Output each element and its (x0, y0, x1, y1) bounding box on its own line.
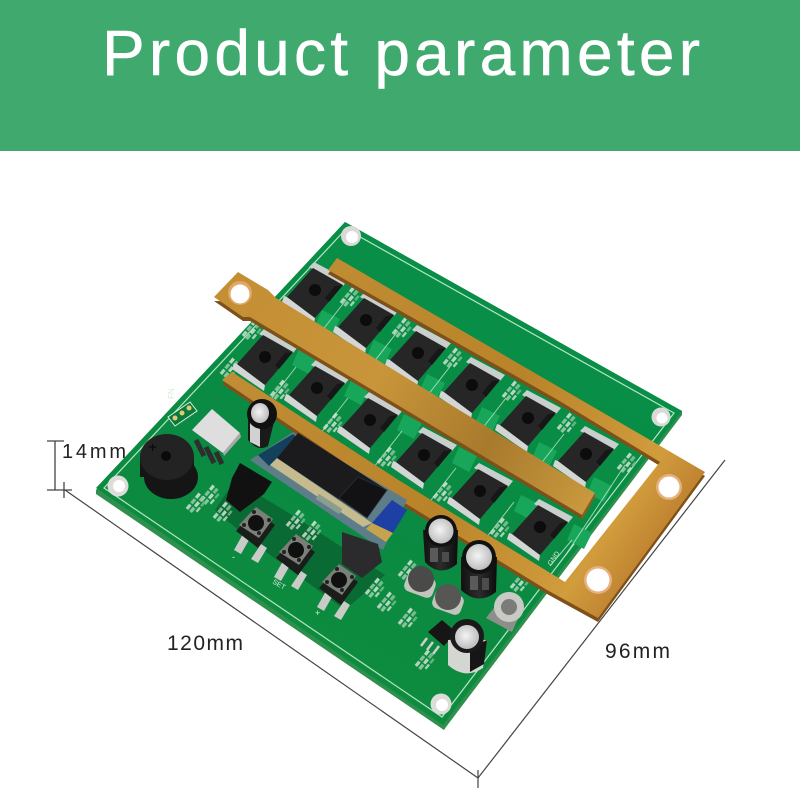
push button: minus (234, 507, 275, 563)
transistor row 1 (282, 262, 619, 488)
circuit board (96, 222, 682, 730)
small SMD component clusters (186, 287, 639, 673)
dimension: 120mm length (65, 490, 478, 788)
button label: minus: - (232, 552, 235, 562)
GND marking: GND (547, 550, 562, 567)
transistor row 2 (232, 329, 573, 561)
OLED display module (250, 432, 407, 550)
mounting hole: bottom (430, 694, 452, 714)
trace lines (268, 300, 625, 566)
copper frame bar with terminal plate (222, 258, 705, 622)
mounting hole: top (341, 226, 361, 246)
mounting hole: right (652, 408, 670, 426)
push button: plus (317, 564, 358, 620)
dimension: 120mm length: 120mm (167, 632, 243, 655)
dimension: 14mm height: 14mm (62, 441, 126, 463)
push button: set (274, 534, 315, 590)
light green pads between transistors (292, 310, 612, 549)
dimension: 96mm width: 96mm (605, 640, 670, 663)
mounting hole: left (108, 476, 128, 496)
dimension: 96mm width (478, 460, 725, 778)
black pin header block (226, 463, 272, 512)
header banner (0, 0, 800, 151)
copper centre bar with eyelet (214, 272, 595, 520)
OLED screen (277, 433, 387, 518)
inductor 2 (430, 584, 466, 617)
small electrolytic capacitor (247, 399, 277, 448)
large electrolytic capacitor 2 (461, 540, 497, 599)
inductor 1 (402, 566, 438, 600)
flex connector (316, 494, 342, 514)
terminal hole: upper (656, 474, 682, 500)
voltage regulator (421, 620, 456, 654)
blue trimmer (372, 500, 407, 533)
eyelet hole (228, 281, 252, 305)
terminal hole: lower (584, 566, 612, 594)
large electrolytic capacitor 1 (423, 515, 458, 571)
button label: set: SET (271, 579, 287, 592)
button label: plus: + (315, 608, 320, 618)
header pins: FN (167, 388, 176, 399)
dimension: 14mm height (47, 441, 126, 498)
buzzer (140, 434, 198, 499)
opto relay (192, 409, 241, 464)
dark zone around controls (215, 480, 385, 610)
potentiometer (486, 592, 524, 632)
black foam pad (342, 532, 382, 578)
silver capacitor (448, 619, 487, 673)
title: Product parameter (102, 17, 700, 89)
header pins (167, 388, 197, 426)
